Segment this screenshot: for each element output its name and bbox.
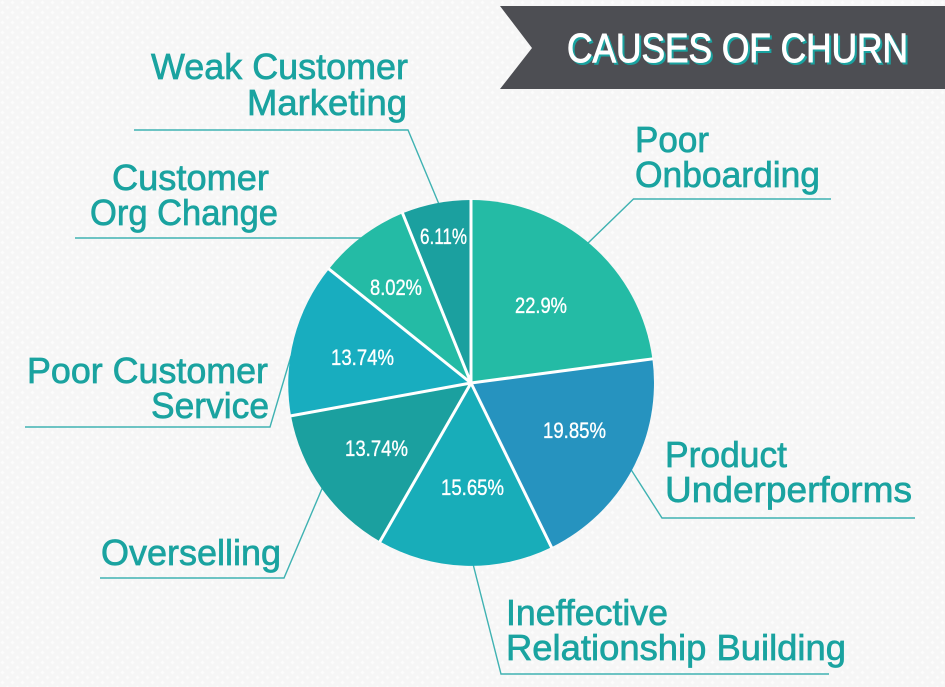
percent values: 13.74%: [345, 436, 408, 461]
label: poor onboarding: [635, 119, 820, 195]
slice: ineffective relationship building: [380, 383, 552, 566]
percent values: 22.9%: [515, 293, 567, 318]
percent values: 8.02%: [370, 275, 422, 300]
percent values: 19.85%: [543, 418, 606, 443]
label: poor onboarding: Poor: [635, 119, 709, 160]
percent values: 6.11%: [420, 224, 467, 249]
label: poor customer service: Service: [151, 385, 269, 426]
title banner: [500, 6, 945, 89]
label: ineffective relationship building: [506, 592, 846, 668]
label: customer org change: [90, 157, 278, 233]
leader lines: [25, 130, 915, 674]
slice: customer org change: [329, 213, 471, 383]
slice: poor onboarding: [471, 200, 652, 383]
label: overselling: Overselling: [101, 532, 281, 573]
slice: product underperforms: [471, 359, 654, 547]
label: customer org change: Org Change: [90, 192, 278, 233]
slice: weak customer marketing: [403, 200, 471, 383]
label: product underperforms: Underperforms: [665, 469, 912, 510]
label: poor onboarding: Onboarding: [635, 154, 820, 195]
label: poor customer service: [27, 350, 269, 426]
label: customer org change: Customer: [112, 157, 269, 198]
label: poor customer service: Poor Customer: [27, 350, 268, 391]
label: weak customer marketing: [151, 46, 408, 123]
slice: poor customer service: [288, 269, 471, 416]
label: product underperforms: Product: [665, 434, 787, 475]
percent values: 13.74%: [331, 345, 394, 370]
pie chart: [288, 199, 654, 566]
label: weak customer marketing: Marketing: [247, 82, 407, 123]
slice dividers: [290, 199, 653, 548]
label: ineffective relationship building: Ineffective: [506, 592, 668, 633]
percent values: [331, 224, 606, 500]
slice: overselling: [291, 383, 471, 542]
label: weak customer marketing: Weak Customer: [151, 46, 408, 87]
label: product underperforms: [665, 434, 912, 510]
label: ineffective relationship building: Relationship Building: [506, 627, 846, 668]
percent values: 15.65%: [441, 475, 504, 500]
